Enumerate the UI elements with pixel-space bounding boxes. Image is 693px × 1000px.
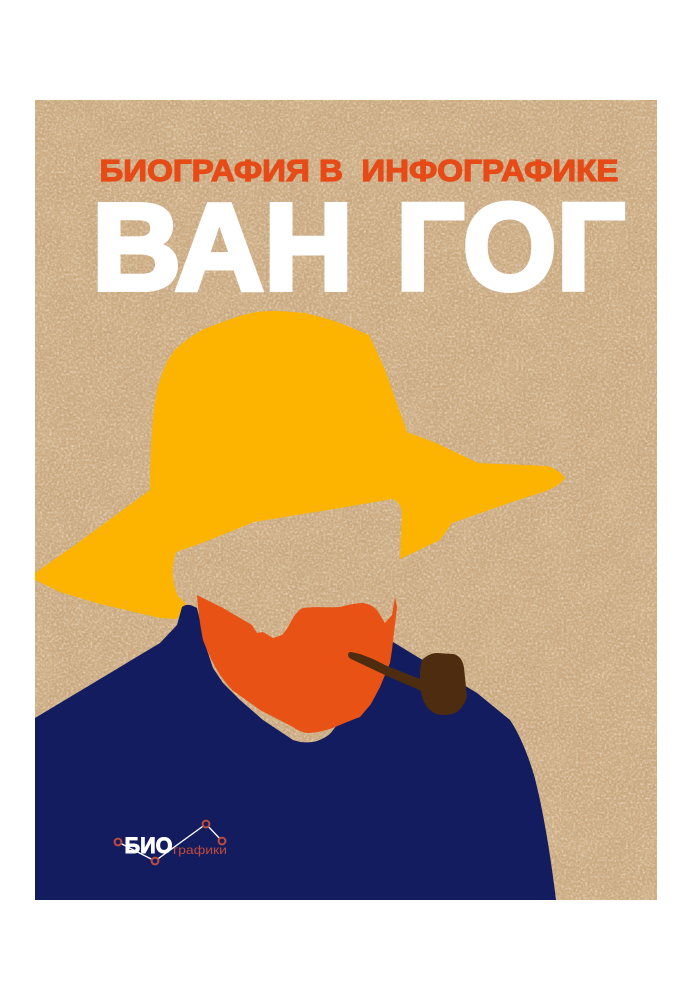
panel: kraft paper background <box>35 100 657 900</box>
title <box>92 180 625 316</box>
beard <box>197 595 397 733</box>
illustration: Van Gogh portrait <box>35 311 565 900</box>
logo nodes <box>115 821 225 864</box>
hat <box>35 311 565 619</box>
title word: Ван: ВАН <box>92 180 353 316</box>
pipe <box>348 652 467 715</box>
title word: Гог: ГОГ <box>396 180 625 316</box>
subtitle: БИОГРАФИЯ В ИНФОГРАФИКЕ <box>100 153 618 188</box>
logo wordmark bold: БИО <box>124 833 172 858</box>
jacket <box>35 605 556 900</box>
logo: Биографики <box>115 821 227 864</box>
logo wordmark light: графики <box>173 843 227 857</box>
logo graph line <box>118 824 222 861</box>
